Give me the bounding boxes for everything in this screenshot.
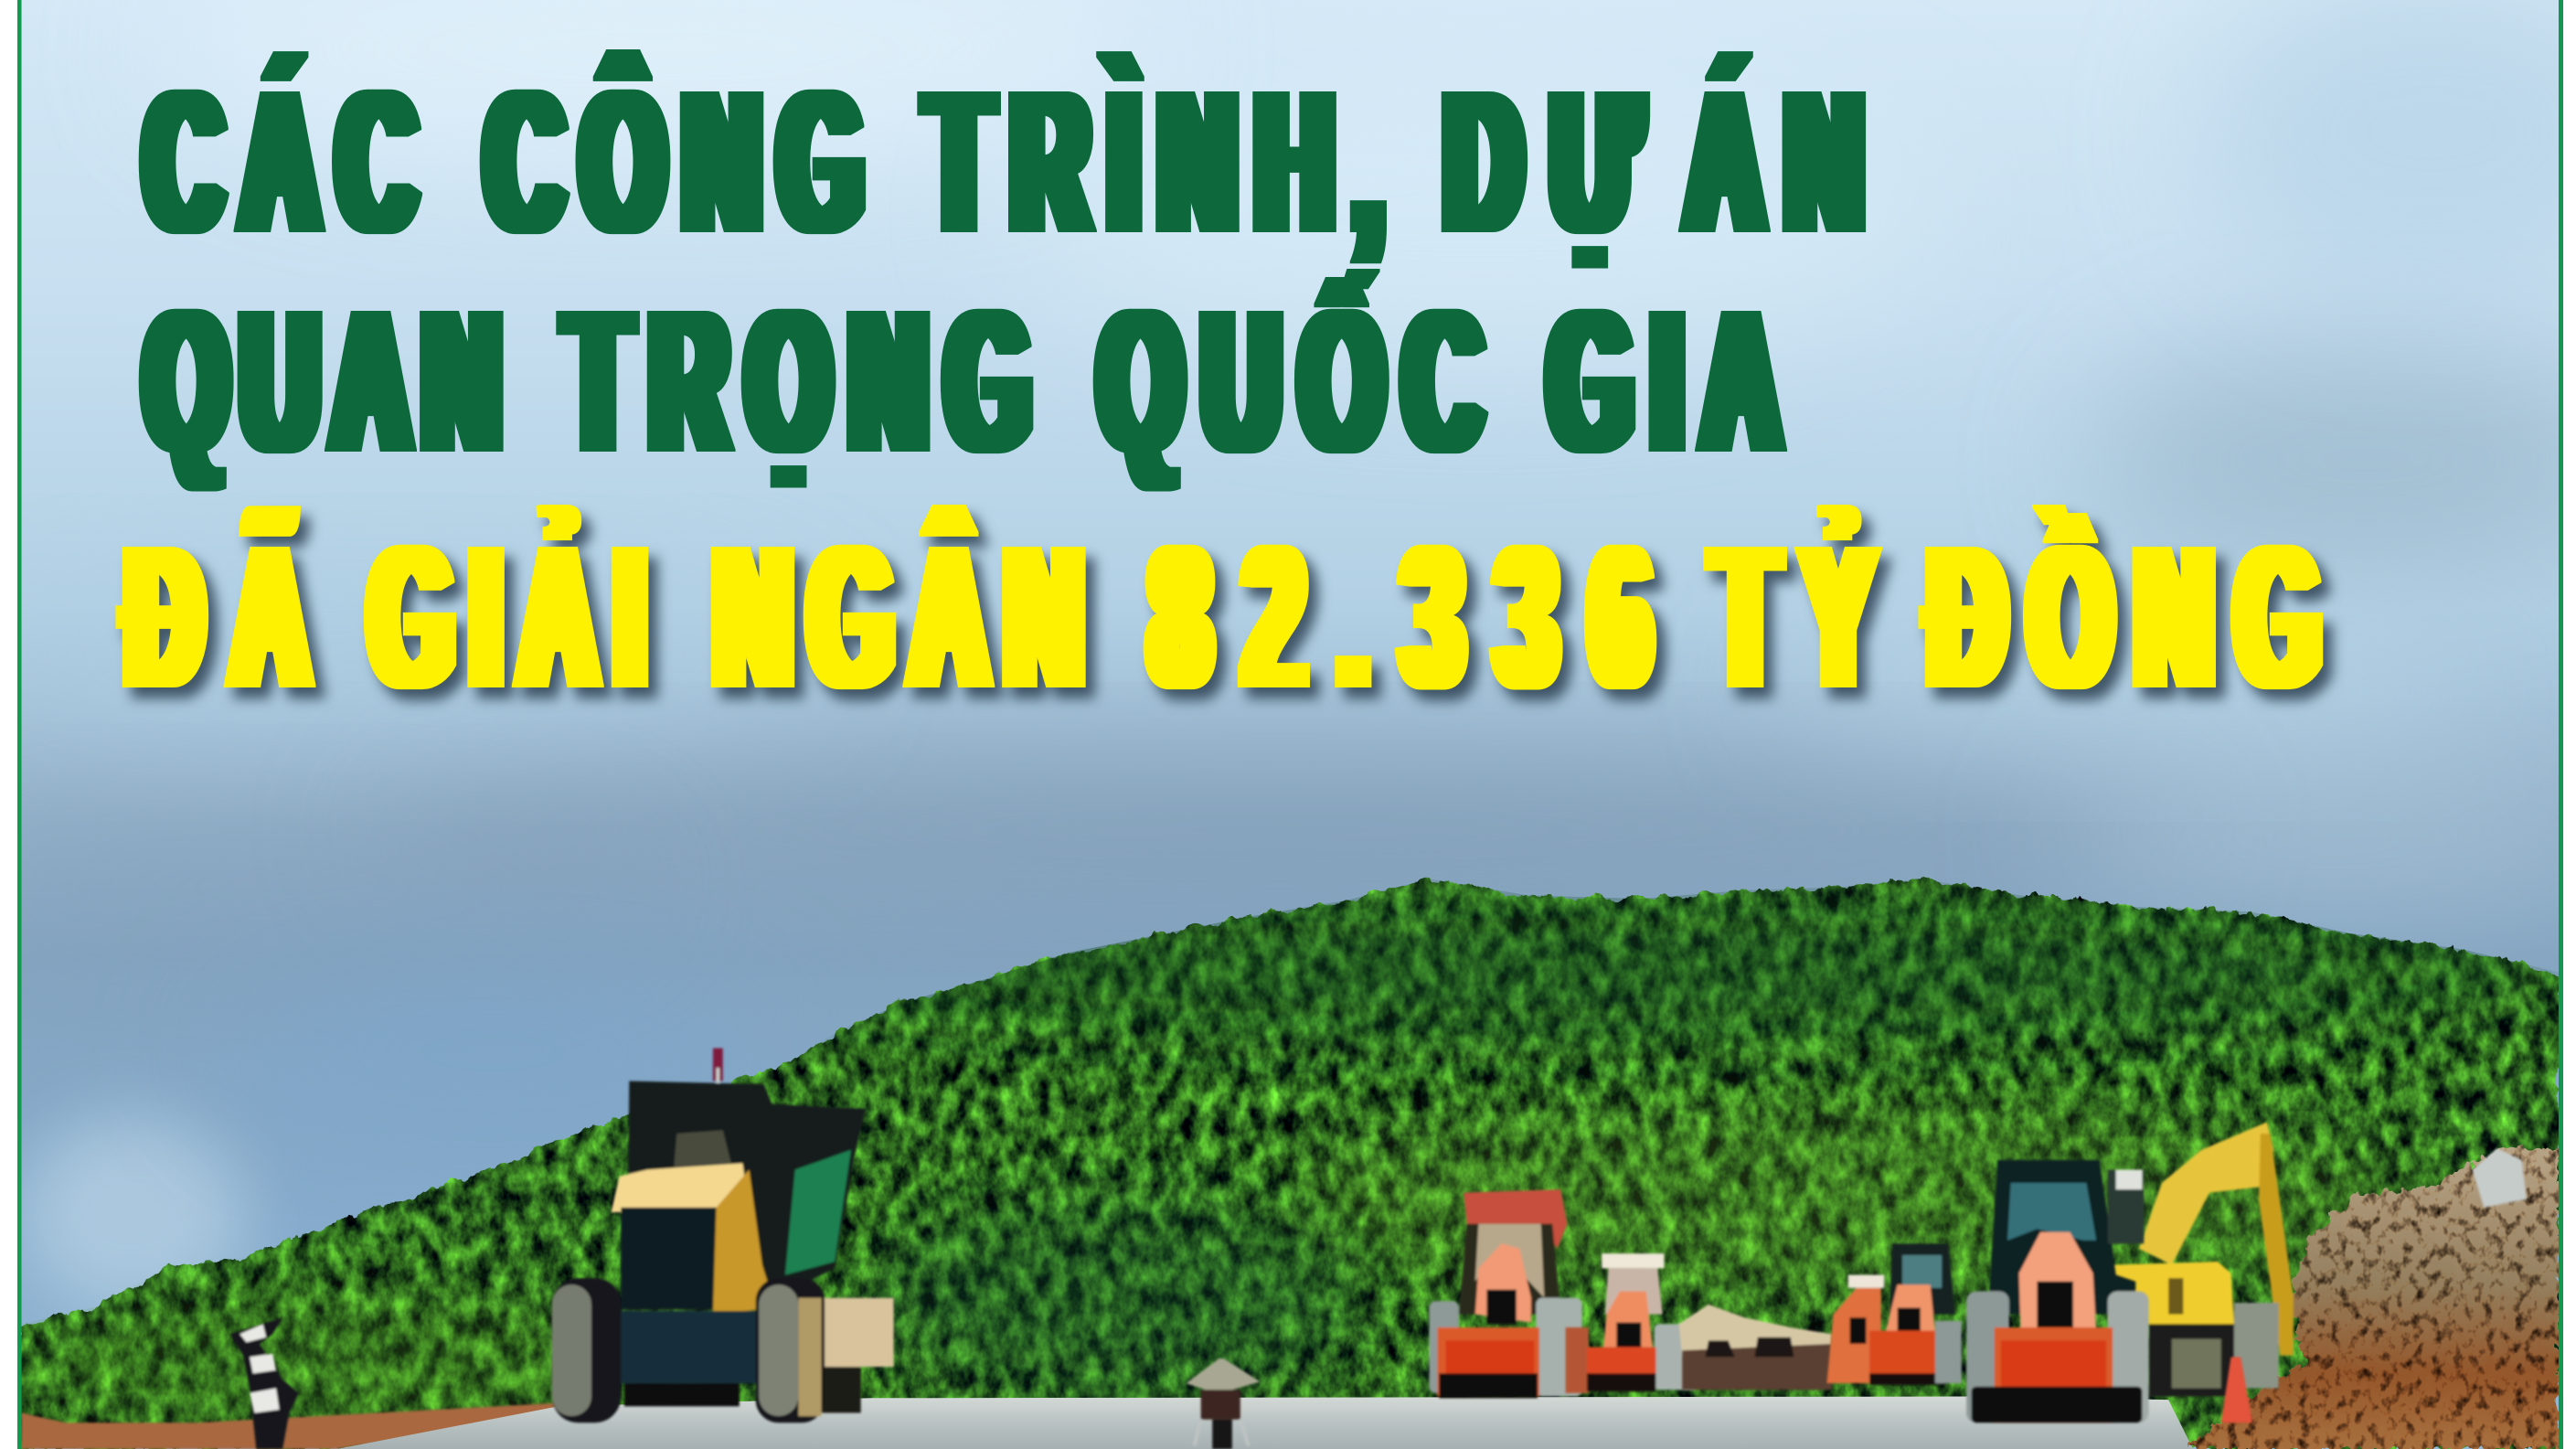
title line 3: highlighted amount: ĐỒNG	[1929, 506, 2318, 730]
title line 2: QUAN	[145, 270, 499, 495]
title line 1: TRÌNH,	[927, 50, 1383, 275]
title line 3: highlighted amount: TỶ	[1713, 505, 1873, 730]
wheels	[552, 1278, 621, 1422]
motorbike	[230, 1317, 299, 1449]
roller 1	[1429, 1189, 1582, 1398]
title line 3: highlighted amount: NGÂN	[715, 506, 1081, 730]
roller 3 and 4	[1826, 1243, 1962, 1385]
title line 1: ÁN	[1687, 50, 1862, 275]
traffic cone	[2221, 1357, 2252, 1422]
red soil verge	[21, 1403, 559, 1449]
cab	[627, 1081, 866, 1298]
rocky embankment	[2185, 1146, 2560, 1449]
rear blade	[818, 1298, 894, 1367]
title line 2	[145, 270, 1779, 495]
worker with barrow	[1187, 1358, 1260, 1449]
title line 1: CÔNG	[486, 50, 861, 275]
title line 3: highlighted amount: 82.336	[1151, 506, 1649, 730]
title line 3: highlighted amount	[126, 505, 2318, 730]
rock pile	[1679, 1305, 1832, 1390]
title line 3: highlighted amount: GIẢI	[370, 505, 644, 730]
roller 2	[1566, 1253, 1697, 1393]
title line 2: QUỐC	[1100, 270, 1481, 495]
title line 1: DỰ	[1445, 50, 1640, 275]
yellow excavator	[2109, 1122, 2294, 1396]
title line 2: TRỌNG	[566, 270, 1028, 495]
title line 1	[145, 50, 1862, 275]
forested hill	[0, 879, 2562, 1449]
title line 2: GIA	[1549, 270, 1779, 495]
beacon	[713, 1049, 723, 1088]
road	[336, 1396, 2193, 1449]
motor grader	[552, 1049, 894, 1422]
engine hood	[612, 1163, 749, 1212]
title line 1: CÁC	[145, 50, 414, 275]
title	[126, 50, 2318, 730]
large roller	[1966, 1160, 2149, 1422]
title line 3: highlighted amount: ĐÃ	[126, 506, 308, 730]
